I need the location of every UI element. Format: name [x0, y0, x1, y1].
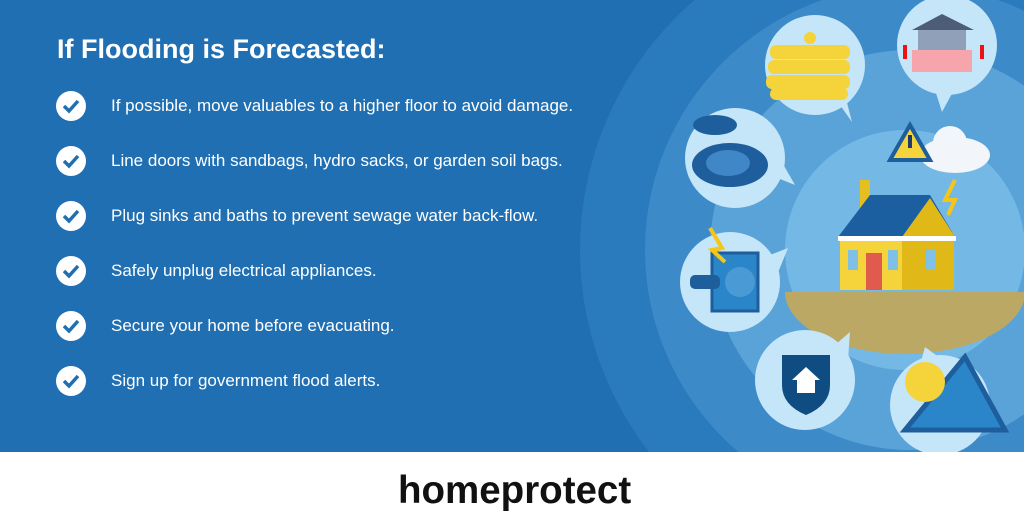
item 6: Sign up for government flood alerts.	[111, 371, 380, 390]
item 4: Safely unplug electrical appliances.	[111, 261, 377, 280]
main house	[838, 180, 956, 290]
sandbags	[766, 32, 850, 100]
elevated house	[903, 14, 984, 72]
item 3: Plug sinks and baths to prevent sewage water back-flow.	[111, 206, 538, 225]
item 4	[56, 256, 377, 286]
logo: homeprotect	[398, 469, 631, 512]
item 3	[56, 201, 538, 231]
drain	[692, 115, 768, 187]
item 1: If possible, move valuables to a higher floor to avoid damage.	[111, 96, 573, 115]
checklist	[56, 91, 573, 396]
item 6	[56, 366, 380, 396]
alarm triangle	[905, 357, 1005, 430]
plug	[690, 228, 758, 311]
bubbles	[680, 0, 997, 455]
item 2: Line doors with sandbags, hydro sacks, or garden soil bags.	[111, 151, 563, 170]
title: If Flooding is Forecasted:	[57, 34, 386, 64]
item 1	[56, 91, 573, 121]
warning + cloud	[890, 125, 990, 173]
item 2	[56, 146, 563, 176]
item 5: Secure your home before evacuating.	[111, 316, 395, 335]
item 5	[56, 311, 395, 341]
shield	[782, 355, 830, 415]
